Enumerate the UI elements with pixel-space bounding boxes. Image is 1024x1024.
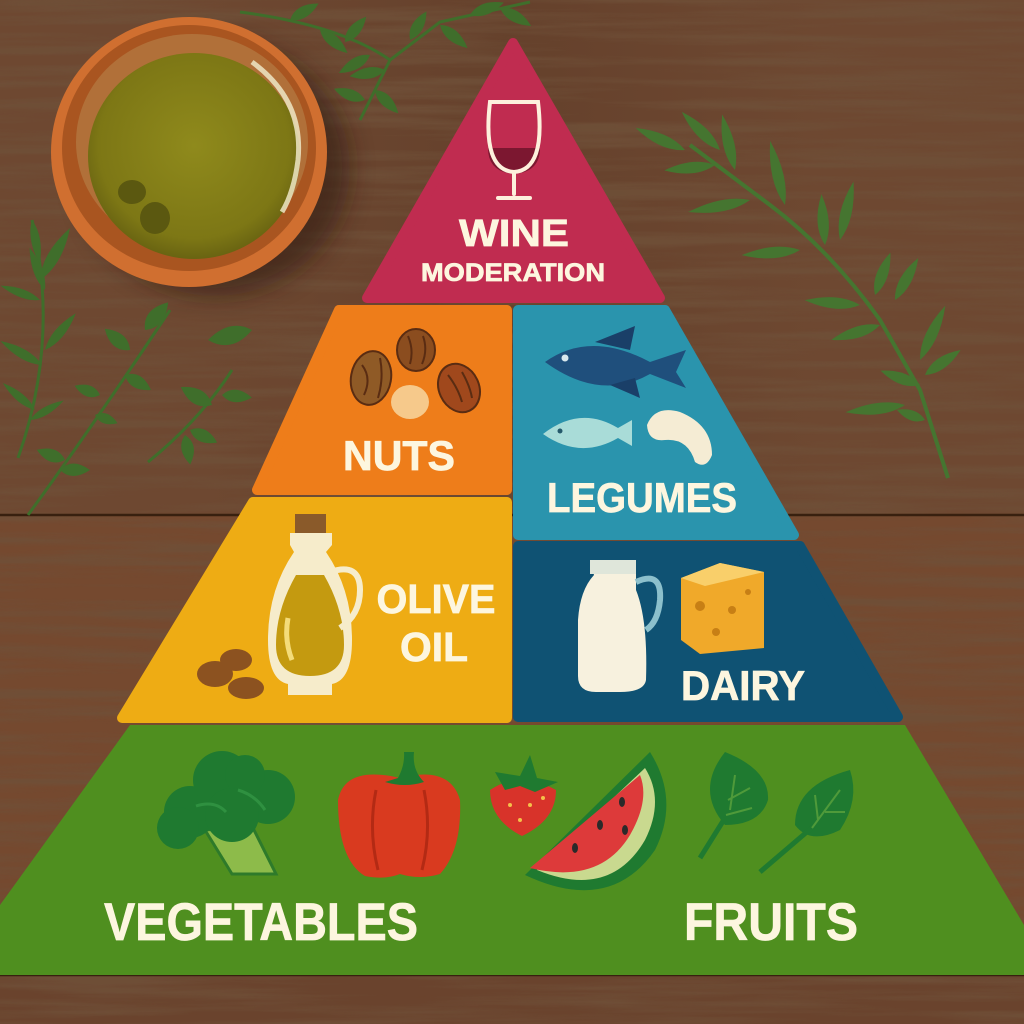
icon: nuts bbox=[347, 329, 488, 419]
pyramid tier: wine bbox=[367, 43, 660, 298]
icon: red pepper bbox=[338, 752, 460, 878]
moderation label: MODERATION bbox=[421, 259, 605, 287]
icon: bean bbox=[647, 410, 712, 465]
herb sprig right bbox=[633, 108, 964, 478]
pyramid tier: nuts bbox=[257, 310, 507, 490]
dairy label: DAIRY bbox=[681, 662, 805, 709]
icon: olives bbox=[197, 649, 264, 699]
icon: olive oil bottle bbox=[268, 514, 360, 695]
vegetables label: VEGETABLES bbox=[104, 893, 418, 952]
olive oil bowl bbox=[51, 17, 350, 296]
icon: wine glass bbox=[488, 102, 540, 198]
herb sprigs left bbox=[0, 219, 252, 515]
pyramid tier: dairy bbox=[518, 546, 898, 717]
fruits label: FRUITS bbox=[684, 893, 858, 952]
pyramid tier: legumes bbox=[518, 310, 794, 535]
oil label: OIL bbox=[400, 624, 468, 670]
legumes label: LEGUMES bbox=[547, 474, 737, 521]
pyramid tier: olive oil bbox=[122, 502, 507, 718]
icon: large fish bbox=[545, 326, 686, 398]
icon: strawberry bbox=[490, 755, 558, 836]
pyramid tier: vegetables and fruits bbox=[0, 725, 1024, 975]
icon: broccoli bbox=[157, 751, 295, 874]
olive label: OLIVE bbox=[376, 576, 496, 622]
herb sprig top bbox=[240, 0, 534, 120]
icon: cheese bbox=[681, 563, 764, 654]
nuts label: NUTS bbox=[343, 432, 455, 479]
icon: small fish bbox=[543, 418, 632, 448]
icon: watermelon bbox=[525, 752, 666, 890]
icon: leafy greens bbox=[700, 752, 853, 872]
icon: milk jug bbox=[578, 560, 660, 692]
wine label: WINE bbox=[459, 213, 569, 255]
